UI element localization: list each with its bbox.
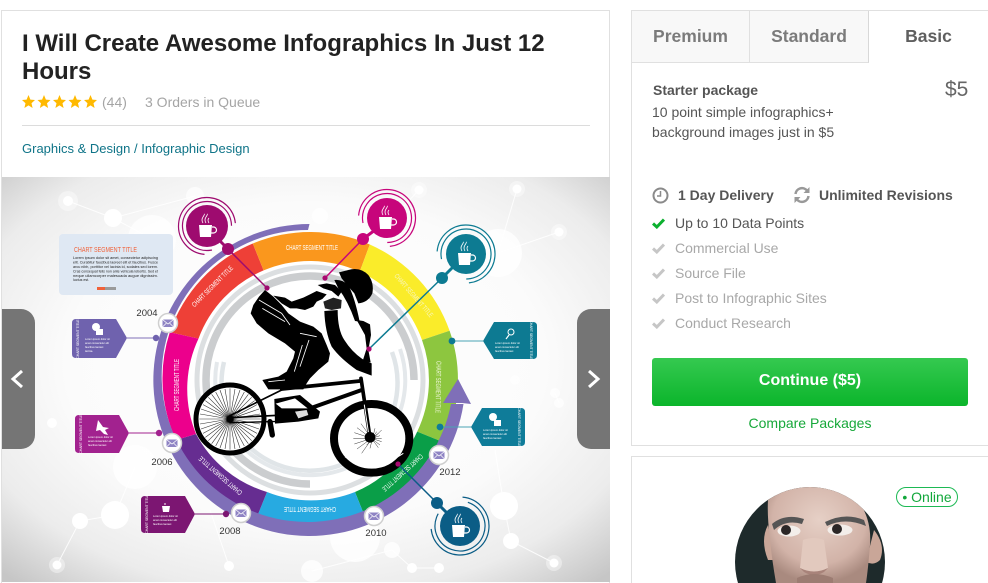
rider highlights bbox=[259, 300, 317, 382]
package price: $5 bbox=[945, 78, 968, 101]
tab: basic: Basic bbox=[905, 26, 952, 46]
panel: gig overview bbox=[1, 10, 610, 583]
tab: basic bbox=[869, 11, 988, 63]
text callout panel: neque ullamcorper malesuada augue dignissim. bbox=[73, 274, 158, 278]
callout: 2008: Lorem ipsum dolor sit bbox=[153, 514, 178, 518]
segment: lime bbox=[417, 331, 458, 442]
online badge bbox=[896, 487, 958, 507]
rating stars bbox=[22, 95, 97, 108]
callout: 2004 bbox=[72, 319, 159, 359]
year labels: 2010 bbox=[365, 528, 387, 539]
rider chest detail bbox=[323, 298, 342, 310]
purple timeline arrow bbox=[153, 224, 471, 536]
orders in queue: 3 Orders in Queue bbox=[145, 94, 260, 110]
segment labels: CHART SEGMENT TITLE bbox=[434, 361, 441, 413]
callout: 2004: CHART SEGMENT TITLE bbox=[76, 319, 80, 359]
feature: source file: Source File bbox=[675, 265, 746, 281]
segment labels: CHART SEGMENT TITLE bbox=[286, 245, 338, 252]
icon: cup circle teal bbox=[435, 223, 497, 285]
rider forearm bbox=[324, 310, 372, 376]
callout: 2008: amet consectetur elit bbox=[153, 518, 177, 522]
package name: Starter package bbox=[653, 82, 758, 98]
segment labels: CHART SEGMENT TITLE bbox=[198, 454, 244, 496]
year labels: 2004 bbox=[136, 308, 158, 319]
arrow: next image bbox=[577, 309, 610, 449]
callout: 2008: faucibus laoreet bbox=[153, 522, 172, 526]
helmet bbox=[339, 269, 373, 303]
icon: cup circle pink bbox=[356, 187, 418, 249]
callout: 2006 bbox=[75, 414, 162, 454]
year labels: 2006 bbox=[151, 457, 173, 468]
callout: 2008: CHART SEGMENT TITLE bbox=[145, 494, 149, 534]
rider torso bbox=[334, 280, 360, 322]
text callout panel: Cras consequat felis non ante vehicula lobortis. Sed et bbox=[73, 270, 158, 274]
compare packages link: Compare Packages bbox=[749, 415, 871, 431]
arrow: previous image bbox=[2, 309, 35, 449]
year labels bbox=[136, 308, 461, 539]
callout: 2004: lacinia. bbox=[85, 349, 93, 353]
package description bbox=[652, 104, 834, 140]
segment: purple bbox=[176, 434, 267, 518]
inner white disc with grey arcs bbox=[185, 255, 435, 505]
callout: upper right: CHART SEGMENT TITLE bbox=[529, 320, 533, 360]
front wheel bbox=[334, 404, 409, 473]
icon: mail badge 2008 bbox=[232, 504, 250, 522]
icon: cup circle wine bbox=[176, 195, 238, 257]
year labels: 2012 bbox=[439, 467, 461, 478]
icon: mail badge 2010 bbox=[364, 506, 384, 526]
segment: yellow bbox=[360, 244, 450, 340]
rider shoe and pedal bbox=[274, 395, 320, 424]
callout: upper right: Lorem ipsum dolor sit bbox=[495, 341, 520, 345]
tab: premium bbox=[632, 11, 750, 63]
text callout panel: elit. Curabitur faucibus laoreet elit et faucibus. Fusce bbox=[73, 260, 158, 264]
text callout panel: CHART SEGMENT TITLE bbox=[74, 247, 137, 254]
callout: lower right: CHART SEGMENT TITLE bbox=[517, 407, 521, 447]
callout: lower right: Lorem ipsum dolor sit bbox=[483, 428, 508, 432]
background network bbox=[47, 181, 567, 582]
rear wheel bbox=[196, 385, 264, 453]
continue button bbox=[652, 358, 968, 406]
callout: lower right: amet consectetur elit bbox=[483, 432, 507, 436]
feature: commercial use: Commercial Use bbox=[675, 240, 778, 256]
callout: 2004: faucibus laoreet bbox=[85, 345, 104, 349]
segment labels: CHART SEGMENT TITLE bbox=[174, 359, 181, 411]
icon: clock bbox=[652, 188, 668, 204]
icon: revisions bbox=[794, 186, 810, 204]
text callout panel: arcu nibh, porttitor vel lacinia id, sodales sed lorem. bbox=[73, 265, 158, 269]
revisions: Unlimited Revisions bbox=[819, 187, 953, 203]
callout: 2006: Lorem ipsum dolor sit bbox=[88, 435, 113, 439]
title: I Will Create Awesome Infographics In Just 12 Hours bbox=[22, 30, 545, 84]
panel: seller bbox=[631, 456, 988, 583]
rider leg bbox=[251, 290, 330, 389]
segment: orange bbox=[253, 232, 370, 272]
year labels: 2008 bbox=[219, 526, 241, 537]
feature: data points: Up to 10 Data Points bbox=[675, 215, 804, 231]
segment labels: CHART SEGMENT TITLE bbox=[380, 452, 424, 492]
callout: lower right: faucibus laoreet bbox=[483, 436, 502, 440]
ring segments bbox=[162, 232, 458, 528]
feature: conduct research: Conduct Research bbox=[675, 315, 791, 331]
text callout panel: Lorem ipsum dolor sit amet, consectetur adipiscing bbox=[73, 256, 158, 260]
icon: mail badge 2006 bbox=[162, 434, 182, 452]
callout: upper right: faucibus laoreet bbox=[495, 349, 514, 353]
delivery time: 1 Day Delivery bbox=[678, 187, 774, 203]
callout: 2008 bbox=[141, 494, 229, 534]
segment: green bbox=[355, 432, 444, 517]
text callout panel bbox=[59, 234, 173, 295]
segment labels: CHART SEGMENT TITLE bbox=[191, 265, 235, 309]
tab: standard: Standard bbox=[771, 26, 847, 46]
package description: background images just in $5 bbox=[652, 124, 834, 140]
callout: 2006: CHART SEGMENT TITLE bbox=[79, 414, 83, 454]
callout: 2006: faucibus laoreet bbox=[88, 443, 107, 447]
callout: 2004: amet consectetur elit bbox=[85, 341, 109, 345]
segment labels: CHART SEGMENT TITLE bbox=[392, 273, 434, 319]
panel: pricing bbox=[631, 10, 988, 446]
tab: standard bbox=[750, 11, 869, 63]
segment labels bbox=[174, 245, 441, 512]
cyclist on BMX bbox=[196, 269, 409, 473]
callout: 2006: amet consectetur elit bbox=[88, 439, 112, 443]
package description: 10 point simple infographics+ bbox=[652, 104, 834, 120]
infographic image bbox=[2, 177, 610, 582]
segment labels: CHART SEGMENT TITLE bbox=[284, 505, 336, 512]
callout: upper right bbox=[449, 320, 537, 360]
rider arm bbox=[273, 291, 327, 310]
callout: upper right: amet consectetur elit bbox=[495, 345, 519, 349]
icon: mail badge 2012 bbox=[430, 446, 448, 464]
segment: magenta bbox=[162, 332, 198, 440]
feature: post to sites: Post to Infographic Sites bbox=[675, 290, 827, 306]
text callout panel: luctus est. bbox=[73, 278, 89, 282]
online badge: • Online bbox=[902, 489, 952, 505]
bike frame bbox=[230, 378, 370, 438]
icon: mail badge 2004 bbox=[158, 314, 178, 332]
review count: (44) bbox=[102, 94, 127, 110]
pointer lines bbox=[228, 239, 442, 503]
tab: premium: Premium bbox=[653, 26, 728, 46]
segment: blue bbox=[256, 492, 365, 528]
segment: red bbox=[170, 244, 264, 339]
seller avatar bbox=[735, 487, 885, 583]
callout: lower right bbox=[437, 407, 525, 447]
rider hand and bars bbox=[357, 320, 371, 362]
icon: cup circle blue bbox=[428, 494, 492, 558]
category breadcrumb: Graphics & Design / Infographic Design bbox=[22, 141, 250, 156]
continue button: Continue ($5) bbox=[759, 372, 861, 389]
callout: 2004: Lorem ipsum dolor sit bbox=[85, 337, 110, 341]
feature list bbox=[652, 215, 827, 331]
rider hands bbox=[318, 283, 342, 297]
